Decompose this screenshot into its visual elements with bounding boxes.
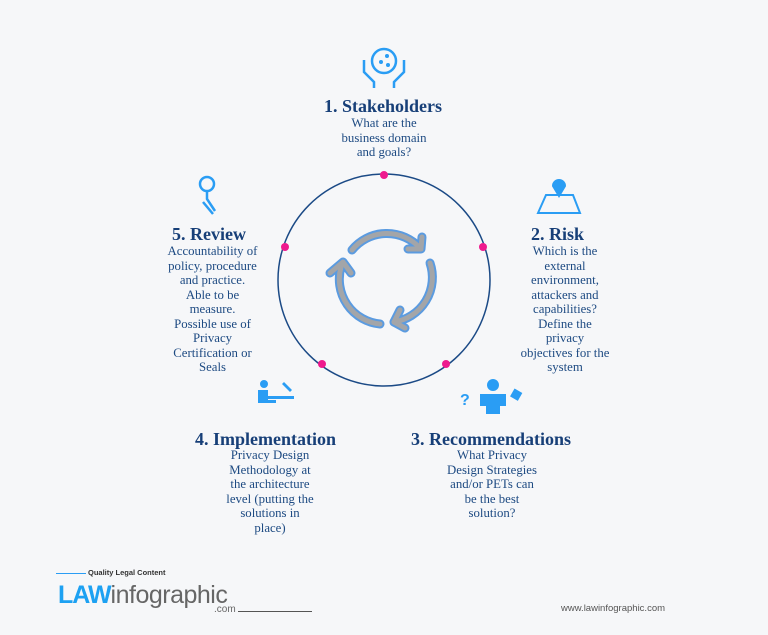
dots (281, 171, 487, 368)
step 2 text: system (547, 360, 583, 374)
step 3 text: solution? (469, 506, 515, 520)
step 4 text: Methodology at (229, 462, 311, 476)
icon: person at desk (258, 380, 294, 403)
icon: person with question and puzzle: ? (460, 392, 470, 409)
step 5 text (168, 244, 258, 374)
logo: .com (214, 604, 236, 615)
step 1 text: and goals? (357, 145, 411, 159)
icon: person with question and puzzle (460, 379, 522, 414)
step 5 text: policy, procedure (168, 258, 257, 272)
step 3 text: What Privacy (457, 448, 527, 462)
step 1 title: 1. Stakeholders (324, 96, 442, 116)
website url: www.lawinfographic.com (561, 603, 665, 614)
step 2 text (521, 244, 609, 374)
icon: map pin (538, 180, 580, 213)
logo: LAWinfographic (58, 581, 227, 609)
step 3 text: Design Strategies (447, 462, 537, 476)
step 5 text: Certification or (173, 346, 252, 360)
step 2 text: Which is the (533, 244, 597, 258)
step 4 text: the architecture (230, 477, 310, 491)
step 1 text (342, 116, 426, 159)
step 3 title: 3. Recommendations (411, 429, 571, 449)
step 5 text: Accountability of (168, 244, 257, 258)
icon: magnifier hand (200, 177, 215, 214)
step 2 text: external (544, 258, 586, 272)
step 4 text: place) (254, 520, 286, 534)
step 3 text: be the best (465, 492, 519, 506)
step 3 text: and/or PETs can (450, 477, 534, 491)
circle ring (278, 174, 490, 386)
step 4 text (226, 448, 314, 535)
step 5 text: measure. (190, 302, 235, 316)
step 3 text (447, 448, 537, 520)
step 5 text: Privacy (193, 331, 232, 345)
step 2 text: environment, (531, 273, 599, 287)
step 1 text: business domain (342, 130, 426, 144)
step 2 text: privacy (546, 331, 584, 345)
icon: hands with globe (364, 49, 404, 88)
step 4 title: 4. Implementation (195, 429, 336, 449)
step 5 text: Possible use of (174, 316, 251, 330)
step 5 title: 5. Review (172, 224, 246, 244)
step 2 title: 2. Risk (531, 224, 584, 244)
step 5 text: and practice. (180, 273, 245, 287)
step 5 text: Able to be (186, 288, 239, 302)
step 4 text: level (putting the (226, 492, 314, 506)
step 4 text: Privacy Design (231, 448, 309, 462)
logo: Quality Legal Content (88, 568, 166, 577)
step 2 text: objectives for the (521, 346, 609, 360)
step 1 text: What are the (351, 116, 417, 130)
icon: cycle arrows (330, 233, 432, 328)
logo (56, 568, 312, 615)
step 2 text: Define the (538, 316, 592, 330)
step 5 text: Seals (199, 360, 226, 374)
step 2 text: capabilities? (533, 302, 597, 316)
step 4 text: solutions in (240, 506, 300, 520)
step 2 text: attackers and (531, 288, 599, 302)
